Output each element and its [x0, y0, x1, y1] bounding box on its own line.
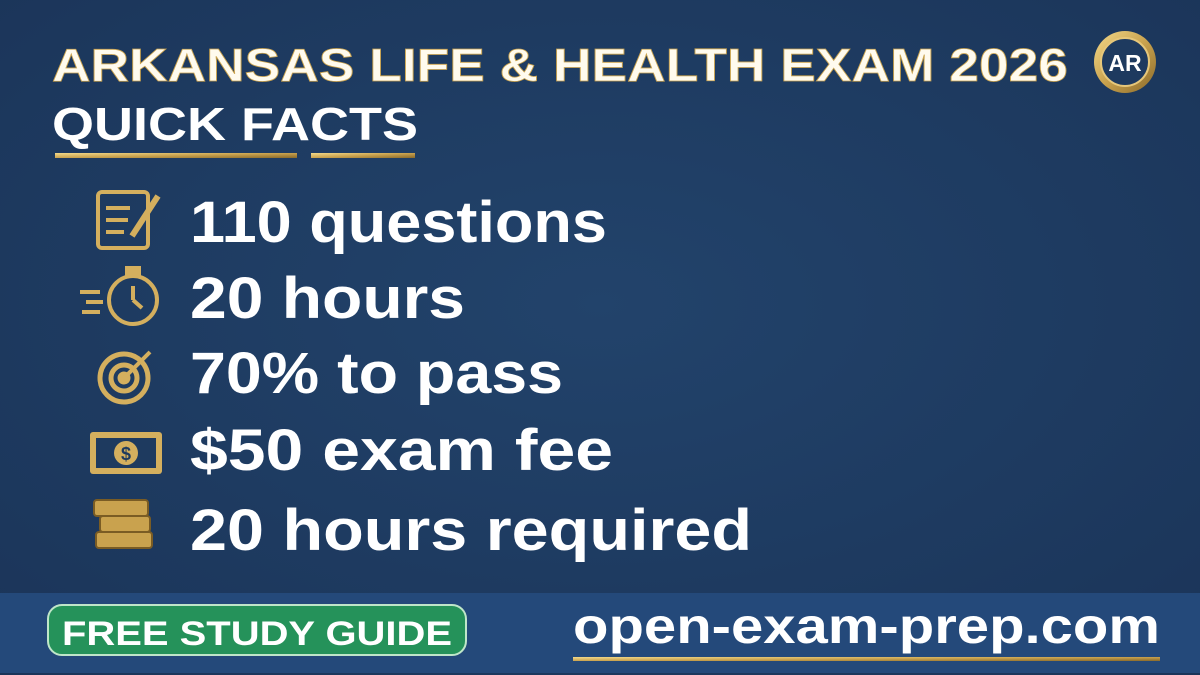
- button: free study guide: FREE STUDY GUIDE: [62, 615, 452, 653]
- icon: notepad: [98, 192, 158, 248]
- icon: money: [90, 432, 162, 474]
- icon: target: [100, 352, 150, 402]
- footer band: [0, 593, 1200, 673]
- badge: AR seal: AR: [1108, 50, 1142, 76]
- icon: stopwatch: [80, 268, 157, 324]
- icon: money: $: [121, 444, 131, 464]
- fact list: [80, 190, 752, 563]
- button: free study guide: [48, 605, 466, 655]
- fact: pass: 70% to pass: [190, 341, 563, 406]
- title: ARKANSAS LIFE & HEALTH EXAM 2026: [52, 39, 1068, 91]
- fact: required: 20 hours required: [190, 498, 752, 563]
- fact: hours: 20 hours: [190, 266, 465, 331]
- fact: fee: $50 exam fee: [190, 418, 613, 483]
- subtitle: QUICK FACTS: [52, 98, 418, 150]
- icon: books: [94, 500, 152, 548]
- fact: questions: 110 questions: [190, 190, 607, 255]
- badge: AR seal: [1094, 31, 1156, 93]
- url: open-exam-prep.com: [573, 598, 1160, 654]
